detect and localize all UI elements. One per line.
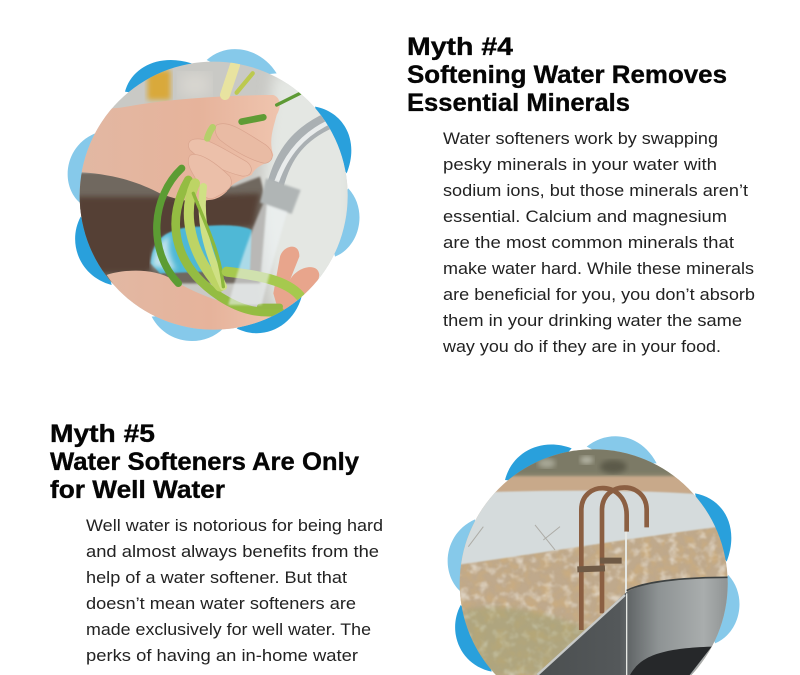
text block: Myth #4 body: are the most common minerals that [443, 233, 734, 252]
text block: Myth #4 body: them in your drinking water the same [443, 311, 742, 330]
text block: Myth #4 body: sodium ions, but those minerals aren’t [443, 181, 748, 200]
text block: Myth #5 body: made exclusively for well water. The [86, 620, 371, 639]
photo [457, 443, 733, 675]
text block: Myth #5 body: Well water is notorious for being hard [86, 516, 383, 535]
photo blob: copper pipes filling a metal tub [448, 436, 739, 675]
text block: Myth #4 body [442, 129, 755, 356]
text block: Myth #4 body: make water hard. While these minerals [443, 259, 754, 278]
heading: Myth #5: Water Softeners Are Only [50, 448, 359, 476]
water stream [625, 532, 627, 594]
text block: Myth #4 body: way you do if they are in your food. [442, 337, 721, 356]
text block: Myth #4 body: pesky minerals in your water with [443, 155, 717, 174]
green onion stalks [157, 65, 300, 312]
heading: Myth #4: Softening Water Removes [407, 61, 727, 89]
gravel texture [457, 527, 733, 675]
text block: Myth #5 body: perks of having an in-home water [86, 646, 358, 665]
text block: Myth #4 body: are beneficial for you, you don’t absorb [443, 285, 755, 304]
upper hand [77, 95, 280, 201]
photo [77, 57, 353, 337]
text block: Myth #5 body: doesn’t mean water softeners are [86, 594, 356, 613]
metal tub [537, 577, 733, 675]
dark background [77, 173, 267, 283]
text block: Myth #5 body [86, 516, 383, 665]
text block: Myth #5 body: help of a water softener. But that [86, 568, 347, 587]
blue bowl [151, 225, 252, 273]
water stream [228, 203, 287, 305]
heading: Myth #4: Myth #4 [407, 33, 513, 61]
heading: Myth #4: Essential Minerals [407, 89, 630, 117]
text block: Myth #5 body: and almost always benefits from the [86, 542, 379, 561]
heading: Myth #5: for Well Water [50, 476, 225, 504]
blue blob lobes [448, 436, 739, 672]
text block: Myth #4 body: Water softeners work by swapping [443, 129, 718, 148]
heading: Myth #4 [407, 33, 727, 117]
copper pipes [577, 487, 647, 630]
heading: Myth #5 [50, 420, 359, 504]
blue blob lobes [68, 49, 359, 341]
text block: Myth #4 body: essential. Calcium and magnesium [443, 207, 727, 226]
photo blob: washing green onions under a tap [68, 49, 359, 341]
lower hand [107, 247, 319, 333]
tap [275, 120, 330, 187]
heading: Myth #5: Myth #5 [50, 420, 155, 448]
